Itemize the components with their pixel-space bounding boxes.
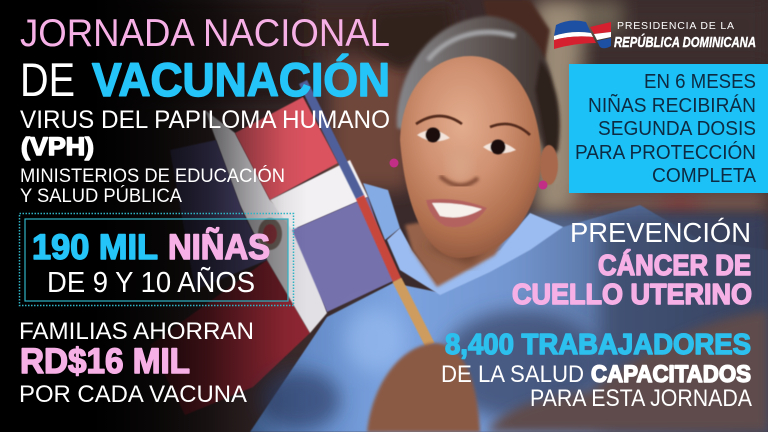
health workers text: 8,400 TRABAJADORES [445, 329, 751, 361]
health workers text: DE LA SALUD [441, 361, 584, 388]
panel: second dose: EN 6 MESES [644, 71, 756, 93]
hand [367, 343, 480, 432]
hair bun [483, 0, 550, 60]
subtitle: virus: VIRUS DEL PAPILOMA HUMANO [20, 106, 390, 134]
shirt folds and shadow [260, 215, 768, 432]
health workers text [441, 329, 752, 412]
logo: presidencia: PRESIDENCIA DE LA [617, 20, 734, 32]
ministries text: Y SALUD PÚBLICA [20, 185, 182, 207]
title [20, 12, 390, 106]
flag upper blue panel [170, 140, 267, 290]
ministries text [20, 165, 285, 207]
prevention text: CÁNCER DE [598, 248, 751, 282]
child hair behind [365, 5, 455, 70]
panel: second dose: NIÑAS RECIBIRÁN [588, 93, 756, 117]
nose [440, 149, 478, 186]
savings text: RD$16 MIL [20, 342, 190, 381]
flag emblem [258, 218, 282, 250]
logo: presidencia [554, 20, 756, 51]
mouth [426, 199, 487, 227]
hair dome [397, 16, 560, 165]
panel: second dose: COMPLETA [652, 165, 757, 187]
flag white panel [205, 110, 327, 333]
health workers text: CAPACITADOS [591, 361, 751, 388]
savings text: POR CADA VACUNA [19, 381, 247, 408]
subtitle: virus: (VPH) [21, 133, 94, 161]
flag lower blue panel [292, 197, 395, 312]
callout: 190 mil niñas [20, 214, 294, 306]
earrings [390, 158, 548, 190]
face [400, 56, 541, 258]
icon: flag [554, 21, 611, 49]
callout: 190 mil niñas: NIÑAS [168, 228, 270, 267]
flag lower red panel [150, 260, 310, 415]
pole [303, 82, 430, 345]
blurred classroom background [120, 0, 768, 215]
callout: 190 mil niñas: DE 9 Y 10 AÑOS [47, 265, 255, 299]
panel: second dose [569, 64, 768, 193]
back shirt [363, 183, 400, 240]
subtitle: virus [20, 106, 390, 161]
flag upper red panel [235, 97, 338, 200]
collar [387, 213, 563, 295]
savings text: FAMILIAS AHORRAN [19, 318, 254, 345]
ministries text: MINISTERIOS DE EDUCACIÓN [20, 165, 285, 187]
title: JORNADA NACIONAL [20, 12, 390, 55]
prevention text [512, 217, 752, 311]
flag white band [270, 160, 368, 230]
ear [540, 145, 558, 185]
prevention text: PREVENCIÓN [570, 217, 751, 248]
right arm [487, 310, 768, 432]
callout: 190 mil niñas: 190 MIL [32, 228, 158, 267]
panel: second dose: PARA PROTECCIÓN [575, 141, 756, 164]
title: DE [20, 53, 75, 106]
neck [405, 205, 525, 287]
shirt [250, 205, 768, 432]
prevention text: CUELLO UTERINO [512, 279, 752, 311]
lower right slate area [480, 215, 768, 432]
title: VACUNACIÓN [92, 53, 390, 106]
eyes [416, 116, 530, 154]
panel: second dose: SEGUNDA DOSIS [598, 118, 756, 140]
savings text [19, 318, 254, 408]
